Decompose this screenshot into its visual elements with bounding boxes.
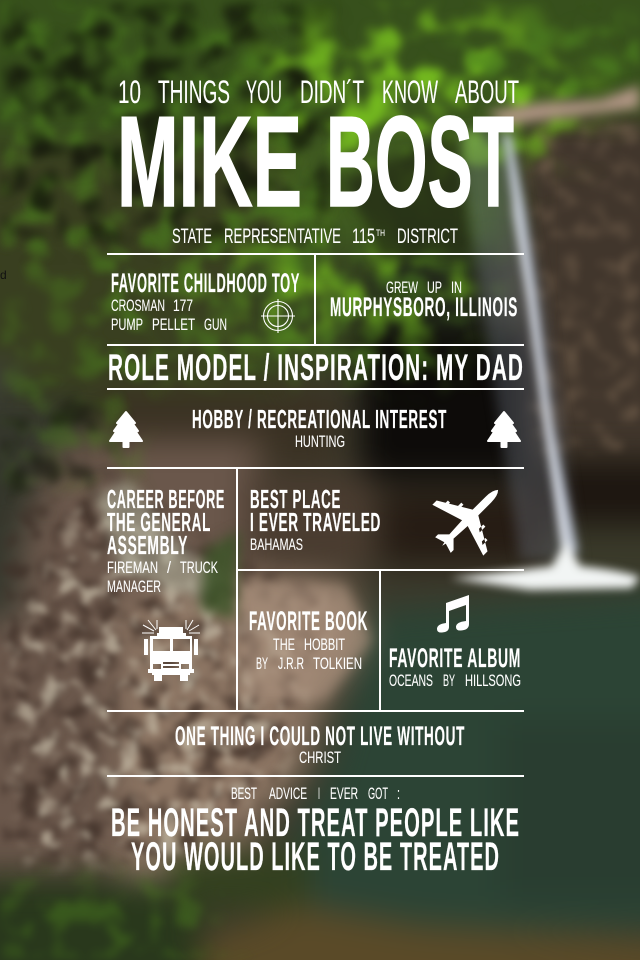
panel: best place: BAHAMAS [250,535,303,554]
panel: best advice: ADVICE [269,784,307,803]
panel: favorite book: TOLKIEN [313,654,362,673]
panel: favorite album: HILLSONG [465,671,521,690]
panel: best advice: GOT [368,784,388,803]
subtitle: 10 things: ABOUT [455,74,519,110]
panel: best advice: EVER [330,784,358,803]
icon: target crosshair [261,299,295,333]
panel: career [107,484,225,681]
subtitle: 10 things: DIDN´T [300,74,364,110]
panel: career: / [167,558,171,577]
panel: favorite childhood toy: 177 [173,296,193,315]
panel: career: ASSEMBLY [107,530,188,560]
panel: best advice: BEST [231,784,257,803]
subtitle: 10 things [118,74,519,110]
panel: favorite childhood toy: CROSMAN [111,296,165,315]
panel: best advice: I [318,784,320,803]
panel: best advice: : [397,784,400,803]
grid lines [107,253,524,777]
district line: DISTRICT [397,225,458,248]
stray letter: d [0,268,7,282]
panel: favorite childhood toy [111,268,300,334]
foliage mottling [0,0,320,260]
panel: favorite album: OCEANS [389,671,433,690]
panel: one thing: CHRIST [299,748,341,767]
panel: favorite album: BY [443,671,455,690]
text: FAVORITE BOOK [249,606,368,636]
text: CAREER BEFORE [107,484,225,514]
icon: music notes [437,595,469,633]
panel: best advice [111,784,520,879]
panel: hobby [110,404,520,451]
icon: fire truck [142,620,200,681]
panel: career: TRUCK [180,558,218,577]
title: Mike Bost: MIKE [117,90,302,234]
panel: grew up in: IN [451,278,462,297]
panel: favorite album: FAVORITE ALBUM [389,643,521,673]
subtitle: 10 things: 10 [118,74,141,110]
panel: career: THE GENERAL [107,507,211,537]
panel: career: MANAGER [107,577,161,596]
panel: favorite album [389,595,521,690]
district line [172,225,458,248]
panel: favorite book: THE [273,635,295,654]
district line: 115 [352,225,375,248]
panel: grew up in: UP [427,278,442,297]
panel: best place [250,464,524,571]
panel: best place: I EVER TRAVELED [250,507,381,537]
subtitle: 10 things: KNOW [382,74,438,110]
icon: tree left [110,412,142,447]
icon: airplane [417,464,524,571]
panel: best place: BEST PLACE [250,484,341,514]
panel: grew up in: GREW [386,278,418,297]
district line: TH [376,228,385,238]
panel: hobby: HUNTING [295,432,345,451]
panel: favorite book [249,606,368,673]
cliff mottling [530,120,640,450]
subtitle: 10 things: THINGS [158,74,230,110]
district line: REPRESENTATIVE [224,225,341,248]
rocks mottling [0,480,340,860]
panel: favorite book: HOBBIT [304,635,345,654]
panel: career: FIREMAN [107,558,158,577]
panel: favorite childhood toy: PUMP [111,315,143,334]
district line: STATE [172,225,212,248]
panel: favorite book: J.R.R [278,654,304,673]
panel: one thing [175,721,465,767]
panel: favorite childhood toy: PELLET [152,315,195,334]
panel: favorite book: BY [256,654,268,673]
panel: grew up in [330,278,518,322]
icon: tree right [488,412,520,447]
subtitle: 10 things: YOU [246,74,282,110]
text: FAVORITE CHILDHOOD TOY [111,268,300,298]
panel: favorite childhood toy: GUN [204,315,227,334]
